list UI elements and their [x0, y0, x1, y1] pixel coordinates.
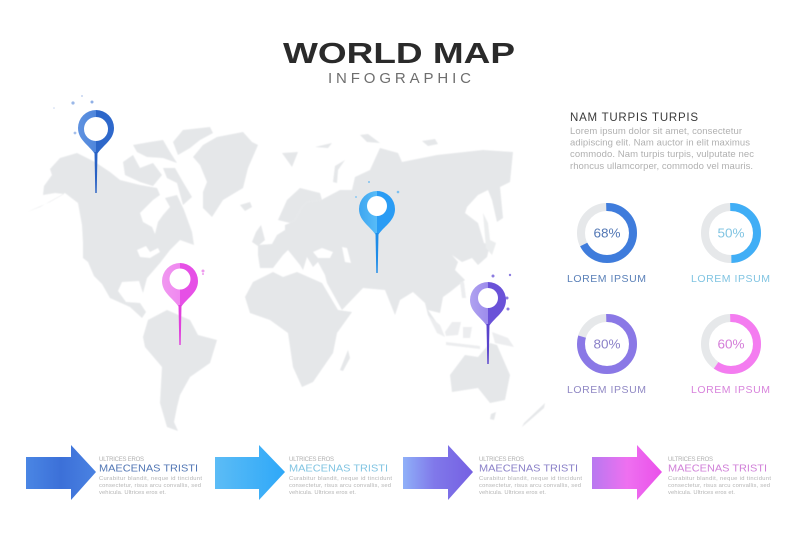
arrow: purple [403, 445, 473, 500]
arrow: blue [26, 445, 96, 500]
caption: blue: Curabitur blandit, neque id tincidunt [99, 476, 202, 482]
uk [252, 225, 265, 246]
caption: cyan: MAECENAS TRISTI [289, 462, 388, 474]
pin: pink, South America [162, 263, 204, 345]
caption: purple: Curabitur blandit, neque id tincidunt [479, 476, 582, 482]
caption: blue: MAECENAS TRISTI [99, 462, 198, 474]
caption: cyan: consectetur, risus arcu convallis, sed [289, 483, 391, 489]
text block: Nam Turpis Turpis: NAM TURPIS TURPIS [570, 112, 698, 124]
caption: pink [668, 457, 771, 496]
caption: cyan: vehicula. Ultrices eros et. [289, 490, 356, 496]
world map [27, 127, 545, 431]
caption: pink: consectetur, risus arcu convallis, sed [668, 483, 770, 489]
africa [245, 272, 352, 387]
donut: 60% [691, 318, 770, 396]
new zealand [522, 403, 545, 427]
caption: blue [99, 457, 202, 496]
indonesia [428, 282, 514, 349]
caption: blue: consectetur, risus arcu convallis, sed [99, 483, 201, 489]
caption: blue: ULTRICES EROS [99, 457, 144, 463]
greenland [193, 132, 258, 217]
caption: cyan: Curabitur blandit, neque id tincidunt [289, 476, 392, 482]
title: WORLD MAP [283, 38, 515, 70]
caption: purple: consectetur, risus arcu convallis, sed [479, 483, 581, 489]
lakes and seas [137, 246, 351, 263]
arrow: pink [592, 445, 662, 500]
north america [27, 153, 194, 318]
pin: blue, North America [53, 95, 114, 193]
subtitle: INFOGRAPHIC [328, 70, 471, 87]
caption: purple: MAECENAS TRISTI [479, 462, 578, 474]
donut: 80%: LOREM IPSUM [567, 384, 646, 396]
donut: 80% [567, 318, 646, 396]
caption: cyan: ULTRICES EROS [289, 457, 334, 463]
australia [450, 343, 510, 403]
caption: cyan [289, 457, 392, 496]
caption: purple [479, 457, 582, 496]
iceland [240, 202, 252, 211]
donut: 60%: LOREM IPSUM [691, 384, 770, 396]
caption: pink: ULTRICES EROS [668, 457, 713, 463]
donut: 68%: LOREM IPSUM [567, 273, 646, 285]
pin: cyan, Asia [355, 181, 399, 273]
caption: purple: vehicula. Ultrices eros et. [479, 490, 546, 496]
donut: 50%: LOREM IPSUM [691, 273, 770, 285]
caption: blue: vehicula. Ultrices eros et. [99, 490, 166, 496]
caption: purple: ULTRICES EROS [479, 457, 524, 463]
madagascar [340, 350, 350, 371]
donut: 68% [567, 207, 646, 285]
donut: 68%: 68% [594, 226, 621, 240]
caption: pink: Curabitur blandit, neque id tincidunt [668, 476, 771, 482]
text block: Nam Turpis Turpis: commodo. Nam turpis turpis, vulputate nec [570, 149, 754, 160]
donut: 80%: 80% [594, 336, 621, 352]
pin: purple, Oceania [470, 274, 511, 364]
donut: 50%: 50% [718, 226, 745, 240]
donut: 60%: 60% [718, 336, 745, 352]
arrow: cyan [215, 445, 285, 500]
south america [143, 310, 217, 431]
text block: Nam Turpis Turpis: adipiscing elit. Nam auctor in elit maximus [570, 138, 750, 148]
arctic islands [360, 134, 380, 143]
japan [483, 213, 496, 255]
caption: pink: vehicula. Ultrices eros et. [668, 490, 735, 496]
donut: 50% [691, 207, 770, 285]
text block: Nam Turpis Turpis [570, 112, 754, 172]
text block: Nam Turpis Turpis: Lorem ipsum dolor sit amet, consectetur [570, 126, 742, 137]
eurasia [258, 148, 513, 337]
text block: Nam Turpis Turpis: rhoncus ullamcorper, commodo vel mauris. [570, 161, 753, 172]
caption: pink: MAECENAS TRISTI [668, 462, 767, 474]
